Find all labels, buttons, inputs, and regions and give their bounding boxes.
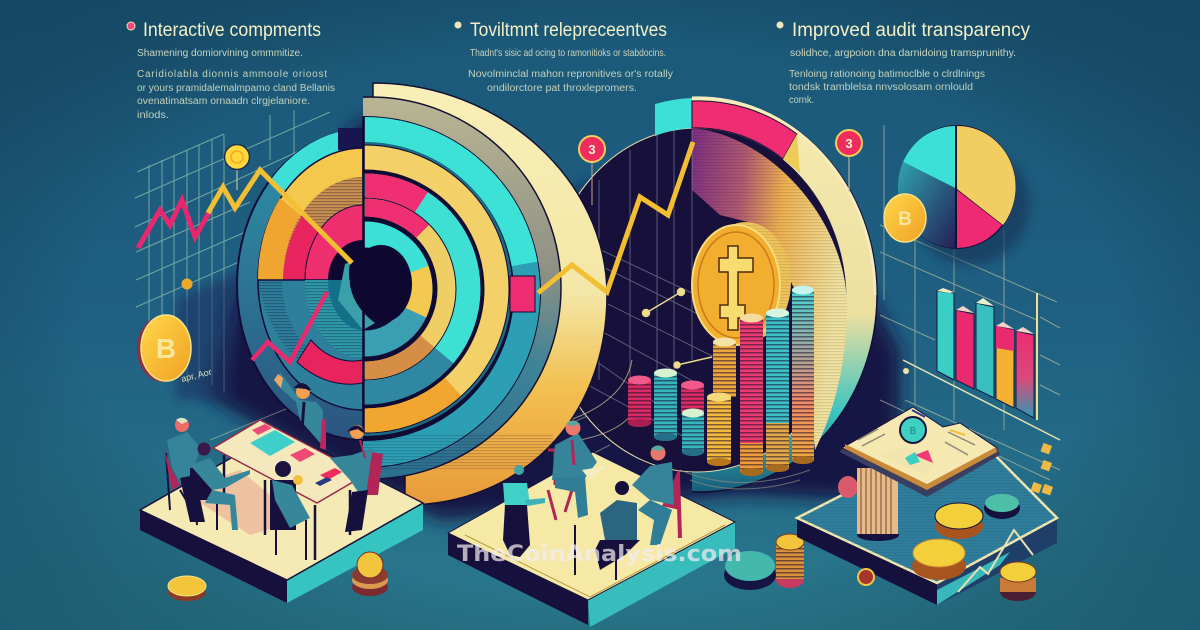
ground coin stack pink xyxy=(776,534,804,588)
orange lower yellow xyxy=(258,198,300,280)
outer cream ring xyxy=(373,83,607,505)
bar pink xyxy=(956,310,974,389)
ground coin 1 xyxy=(168,576,206,601)
inner ribbed teal xyxy=(328,280,363,330)
coin face xyxy=(692,225,780,345)
pink wedge xyxy=(692,101,797,159)
paragraph: tondsk tramblelsa nnvsolosam ornlould xyxy=(789,82,973,93)
person seated top xyxy=(548,420,606,520)
bullet xyxy=(454,22,462,28)
bar cyan 2 xyxy=(976,303,994,398)
pie chart right xyxy=(884,125,1030,265)
yellow markers xyxy=(1031,443,1053,495)
coin on book: B xyxy=(910,426,917,437)
paragraph: cornk. xyxy=(789,95,814,106)
yellow ring segment xyxy=(258,148,363,280)
yellow line middle chart xyxy=(538,142,693,293)
book xyxy=(840,407,1000,497)
stack teal xyxy=(654,368,677,441)
subheading: solidhce, argpoion dna darnidoing tramsprunithy. xyxy=(790,48,1016,59)
stack teal small xyxy=(682,408,704,456)
centre seam xyxy=(362,117,365,433)
platform 3 audit xyxy=(797,407,1057,605)
ground coin teal xyxy=(724,551,776,590)
watermark: TheCoinAnalysis.com xyxy=(457,542,742,567)
stack pink xyxy=(628,376,651,427)
paragraph: Novolminclal mahon repronitives or's rotally xyxy=(468,69,673,80)
stack yellow xyxy=(707,392,731,466)
inner dark hole wedge xyxy=(328,240,363,280)
right chart grid xyxy=(880,125,1060,500)
axis xyxy=(903,360,1060,440)
bar pink yellow xyxy=(996,326,1014,408)
left half outer ring xyxy=(236,132,363,441)
stack tall gradient xyxy=(792,286,814,464)
person right xyxy=(632,446,680,545)
woman xyxy=(270,461,310,560)
person seated left xyxy=(164,418,205,522)
paragraph: ondilorctore pat throxlepromers. xyxy=(487,83,637,94)
small ground coin xyxy=(858,569,874,585)
pin coin 2 xyxy=(836,130,862,192)
axis dot xyxy=(903,368,909,374)
platform xyxy=(140,510,287,603)
teal slice xyxy=(898,162,955,248)
second circular chart xyxy=(572,96,878,493)
person front xyxy=(190,442,250,530)
stack orange xyxy=(713,338,736,397)
inner teal band xyxy=(305,280,363,358)
ribbed shadow under left chart xyxy=(176,270,240,400)
pink segments xyxy=(283,212,325,280)
curved lines xyxy=(570,360,640,440)
pie edge xyxy=(898,125,1016,249)
coin on pie xyxy=(884,194,926,242)
coin stacks xyxy=(628,286,814,476)
trend line xyxy=(958,530,1033,592)
platform 2 meeting xyxy=(448,420,735,627)
pink slice xyxy=(957,190,1002,248)
bar chart right xyxy=(903,288,1060,440)
stack tall pink xyxy=(740,314,763,476)
stack pink small xyxy=(681,380,704,415)
heading: Improved audit transparency xyxy=(792,20,1030,41)
coin edge xyxy=(701,222,791,342)
pink line xyxy=(138,200,210,248)
platform xyxy=(448,533,588,625)
dark gap xyxy=(338,128,363,150)
centre hole xyxy=(350,245,412,323)
pink line in wheel xyxy=(252,292,327,362)
outer cream rim xyxy=(692,98,875,295)
right half rings xyxy=(363,116,553,469)
paragraph: Tenloing rationoing batimoclble o clrdlnings xyxy=(789,69,985,80)
yellow marker line xyxy=(1036,293,1038,420)
pin coin 3: 3 xyxy=(588,142,596,157)
inner dark field xyxy=(547,128,847,472)
inner grid xyxy=(590,130,713,440)
dark grid lines between charts xyxy=(210,395,610,470)
woman standing xyxy=(503,465,545,557)
paragraph: ovenatimatsam ornaadn clrgjelaniore. xyxy=(137,96,310,107)
subheading: Shamening domiorvining ommmitize. xyxy=(137,48,303,59)
paragraph: or yours pramidalemalmpamo cland Bellanis xyxy=(137,83,335,94)
pink lower band xyxy=(297,340,363,384)
grid dots and connectors xyxy=(642,288,712,368)
ribbed base lines under stacks xyxy=(680,470,810,489)
bar cyan xyxy=(937,291,954,380)
lower left teal ring xyxy=(258,280,363,410)
ground coin stacks right xyxy=(1000,562,1036,601)
dark shadow backdrop xyxy=(208,120,900,520)
pin coin 2: 3 xyxy=(845,136,853,151)
paragraph: Caridiolabla dionnis ammoole orioost xyxy=(137,69,327,80)
yellow line xyxy=(208,170,352,263)
person right xyxy=(330,425,383,532)
bitcoin coin left: B xyxy=(156,333,176,364)
subheading: Thadnt's sisic ad ocing to ramonitioks or stabdocins. xyxy=(470,48,666,59)
text block: interactive components xyxy=(127,20,335,121)
coin stack platform 1 xyxy=(352,552,388,596)
inner pink ring xyxy=(305,205,363,280)
bullet xyxy=(776,22,784,28)
coin symbol xyxy=(719,246,753,330)
coin on pie: B xyxy=(898,209,912,230)
ribbed teal bands xyxy=(258,280,310,362)
gold coins xyxy=(912,494,1020,580)
pin coin 3 xyxy=(579,136,605,205)
person standing xyxy=(274,372,326,450)
heading: Toviltmnt relepreceentves xyxy=(470,20,667,41)
cyan upper segment xyxy=(272,132,363,210)
gradient wedge xyxy=(692,128,847,450)
left line chart grid xyxy=(135,110,340,392)
heading: Interactive compments xyxy=(143,20,321,41)
large circular chart xyxy=(236,82,608,505)
coin on book xyxy=(900,417,926,443)
floor inner line xyxy=(465,525,725,597)
yellow wedge xyxy=(783,134,800,173)
text block: tovilment representatives xyxy=(454,20,673,94)
platform 1 meeting xyxy=(140,372,423,603)
shaded floor xyxy=(180,470,300,535)
bullet xyxy=(127,22,135,30)
text block: improved audit transparency xyxy=(776,20,1030,106)
large gold coin xyxy=(692,222,791,345)
person back xyxy=(575,481,640,580)
platform xyxy=(797,518,937,605)
outer disc band xyxy=(692,99,878,493)
grey ring xyxy=(363,96,562,480)
ribbed orange ring xyxy=(283,177,363,280)
cyan wedge xyxy=(655,98,692,136)
yellow slice xyxy=(957,126,1016,225)
paragraph: inlods. xyxy=(137,110,169,121)
table xyxy=(213,420,365,560)
pie shadow xyxy=(910,145,1030,265)
cyan slice xyxy=(903,126,955,188)
small chart label: apr, Aor xyxy=(180,367,213,384)
bar pink teal xyxy=(1016,331,1034,418)
stack tall teal xyxy=(766,308,789,472)
pink chip xyxy=(838,476,858,498)
small coin pin on left chart xyxy=(224,144,250,190)
bitcoin coin left xyxy=(137,315,191,382)
left line chart line xyxy=(138,170,352,263)
small dot on left chart xyxy=(182,278,192,290)
pedestal xyxy=(857,468,899,541)
